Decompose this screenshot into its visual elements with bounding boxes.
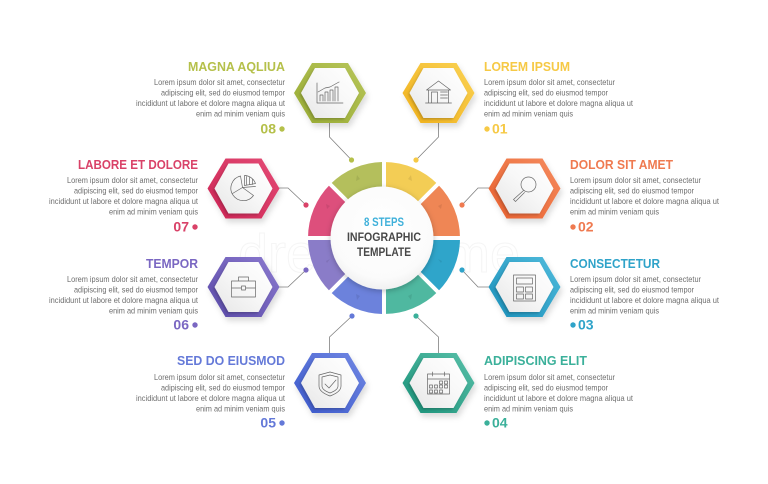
text block: step 4 bbox=[484, 353, 633, 430]
text block: step 4: adipiscing elit, sed do eiusmod tempor bbox=[484, 382, 608, 392]
center title: INFOGRAPHIC bbox=[347, 230, 421, 244]
segment arrow marks bbox=[326, 175, 442, 300]
text block: step 3: incididunt ut labore et dolore magna aliqua ut bbox=[570, 295, 719, 305]
text block: step 2: DOLOR SIT AMET bbox=[570, 157, 673, 172]
connector: step 7 bbox=[279, 188, 309, 208]
text block: step 8 bbox=[136, 59, 286, 136]
icon: shield bbox=[319, 372, 341, 396]
icon: calendar bbox=[428, 372, 450, 394]
connector: step 6 bbox=[279, 267, 309, 287]
text block: step 7: 07 bbox=[173, 218, 189, 234]
text block: step 5: adipiscing elit, sed do eiusmod tempor bbox=[161, 382, 285, 392]
connector: step 8 bbox=[330, 122, 354, 163]
text block: step 7: adipiscing elit, sed do eiusmod tempor bbox=[74, 186, 198, 196]
segment: yellow bbox=[384, 162, 438, 238]
text block: step 3: CONSECTETUR bbox=[570, 256, 661, 271]
text block: step 4: enim ad minim veniam quis bbox=[484, 404, 574, 414]
icon: bar chart bbox=[317, 82, 343, 103]
center circle bbox=[330, 186, 434, 290]
segment: olive bbox=[330, 162, 384, 238]
connector: step 3 bbox=[459, 267, 489, 287]
text block: step 1: adipiscing elit, sed do eiusmod tempor bbox=[484, 88, 608, 98]
icon: pie chart bbox=[231, 176, 256, 201]
segment: indigo bbox=[330, 238, 384, 314]
text block: step 1: Lorem ipsum dolor sit amet, consectetur bbox=[484, 77, 615, 87]
text block: step 7 bbox=[49, 157, 199, 234]
text block: step 3: 03 bbox=[578, 316, 594, 332]
text block: step 5 bbox=[136, 353, 286, 430]
connector: step 1 bbox=[413, 122, 438, 163]
text block: step 4: ADIPISCING ELIT bbox=[484, 353, 587, 368]
hexagon: step 6 briefcase bbox=[208, 257, 280, 317]
icon: briefcase bbox=[232, 277, 256, 297]
text block: step 2: enim ad minim veniam quis bbox=[570, 206, 660, 216]
hexagon: step 8 chart bbox=[294, 63, 366, 123]
connector: step 5 bbox=[330, 313, 355, 353]
segment: orange bbox=[384, 184, 460, 238]
text block: step 6: enim ad minim veniam quis bbox=[109, 306, 199, 316]
text block: step 6 bbox=[49, 256, 199, 332]
hexagon: step 3 calculator bbox=[488, 257, 560, 317]
connector: step 4 bbox=[413, 313, 438, 353]
segment: crimson bbox=[308, 184, 384, 238]
text block: step 7: LABORE ET DOLORE bbox=[78, 157, 198, 172]
text block: step 3: adipiscing elit, sed do eiusmod tempor bbox=[570, 284, 694, 294]
center title: 8 STEPS bbox=[364, 215, 404, 229]
text block: step 7: Lorem ipsum dolor sit amet, consectetur bbox=[67, 175, 198, 185]
text block: step 8: 08 bbox=[260, 120, 276, 136]
text block: step 5: 05 bbox=[260, 414, 276, 430]
text block: step 4: incididunt ut labore et dolore magna aliqua ut bbox=[484, 393, 633, 403]
watermark: dreamstime bbox=[238, 224, 520, 284]
text block: step 1: incididunt ut labore et dolore magna aliqua ut bbox=[484, 98, 633, 108]
segment: purple bbox=[308, 238, 384, 292]
text block: step 5: incididunt ut labore et dolore magna aliqua ut bbox=[136, 393, 285, 403]
text block: step 4: Lorem ipsum dolor sit amet, consectetur bbox=[484, 372, 615, 382]
text block: step 2: 02 bbox=[578, 218, 594, 234]
icon: magnifier bbox=[514, 177, 536, 202]
text block: step 6: incididunt ut labore et dolore magna aliqua ut bbox=[49, 295, 198, 305]
text block: step 1: 01 bbox=[492, 120, 508, 136]
text block: step 8: MAGNA AQLIUA bbox=[188, 59, 286, 74]
text block: step 5: SED DO EIUSMOD bbox=[177, 353, 285, 368]
text block: step 3: enim ad minim veniam quis bbox=[570, 306, 660, 316]
text block: step 1: LOREM IPSUM bbox=[484, 59, 570, 74]
text block: step 8: adipiscing elit, sed do eiusmod tempor bbox=[161, 88, 285, 98]
text block: step 2: adipiscing elit, sed do eiusmod tempor bbox=[570, 186, 694, 196]
segment: teal bbox=[384, 238, 438, 314]
text block: step 6: Lorem ipsum dolor sit amet, consectetur bbox=[67, 274, 198, 284]
text block: step 6: adipiscing elit, sed do eiusmod tempor bbox=[74, 284, 198, 294]
hexagon: step 2 magnifier bbox=[488, 158, 560, 218]
hexagon: step 5 shield bbox=[294, 353, 366, 413]
center title bbox=[347, 215, 421, 259]
text block: step 1: enim ad minim veniam quis bbox=[484, 108, 574, 118]
icon: house bbox=[426, 81, 452, 103]
text block: step 6: 06 bbox=[173, 316, 189, 332]
text block: step 2 bbox=[570, 157, 719, 234]
text block: step 3: Lorem ipsum dolor sit amet, consectetur bbox=[570, 274, 701, 284]
text block: step 8: Lorem ipsum dolor sit amet, consectetur bbox=[154, 77, 285, 87]
text block: step 8: incididunt ut labore et dolore magna aliqua ut bbox=[136, 98, 285, 108]
connector: step 2 bbox=[459, 188, 489, 208]
text block: step 2: Lorem ipsum dolor sit amet, consectetur bbox=[570, 175, 701, 185]
central ring chart bbox=[301, 155, 467, 321]
text block: step 1 bbox=[484, 59, 633, 136]
hexagon: step 1 house bbox=[402, 63, 474, 123]
text block: step 4: 04 bbox=[492, 414, 508, 430]
text block: step 5: enim ad minim veniam quis bbox=[196, 404, 286, 414]
segment: blue bbox=[384, 238, 460, 292]
text block: step 2: incididunt ut labore et dolore magna aliqua ut bbox=[570, 196, 719, 206]
center title: TEMPLATE bbox=[357, 245, 411, 259]
icon: calculator bbox=[514, 275, 536, 301]
text block: step 6: TEMPOR bbox=[146, 256, 199, 271]
text block: step 7: incididunt ut labore et dolore magna aliqua ut bbox=[49, 196, 198, 206]
text block: step 3 bbox=[570, 256, 719, 332]
text block: step 7: enim ad minim veniam quis bbox=[109, 206, 199, 216]
text block: step 8: enim ad minim veniam quis bbox=[196, 108, 286, 118]
text block: step 5: Lorem ipsum dolor sit amet, consectetur bbox=[154, 372, 285, 382]
hexagon: step 7 pie bbox=[208, 158, 280, 218]
hexagon: step 4 calendar bbox=[402, 353, 474, 413]
